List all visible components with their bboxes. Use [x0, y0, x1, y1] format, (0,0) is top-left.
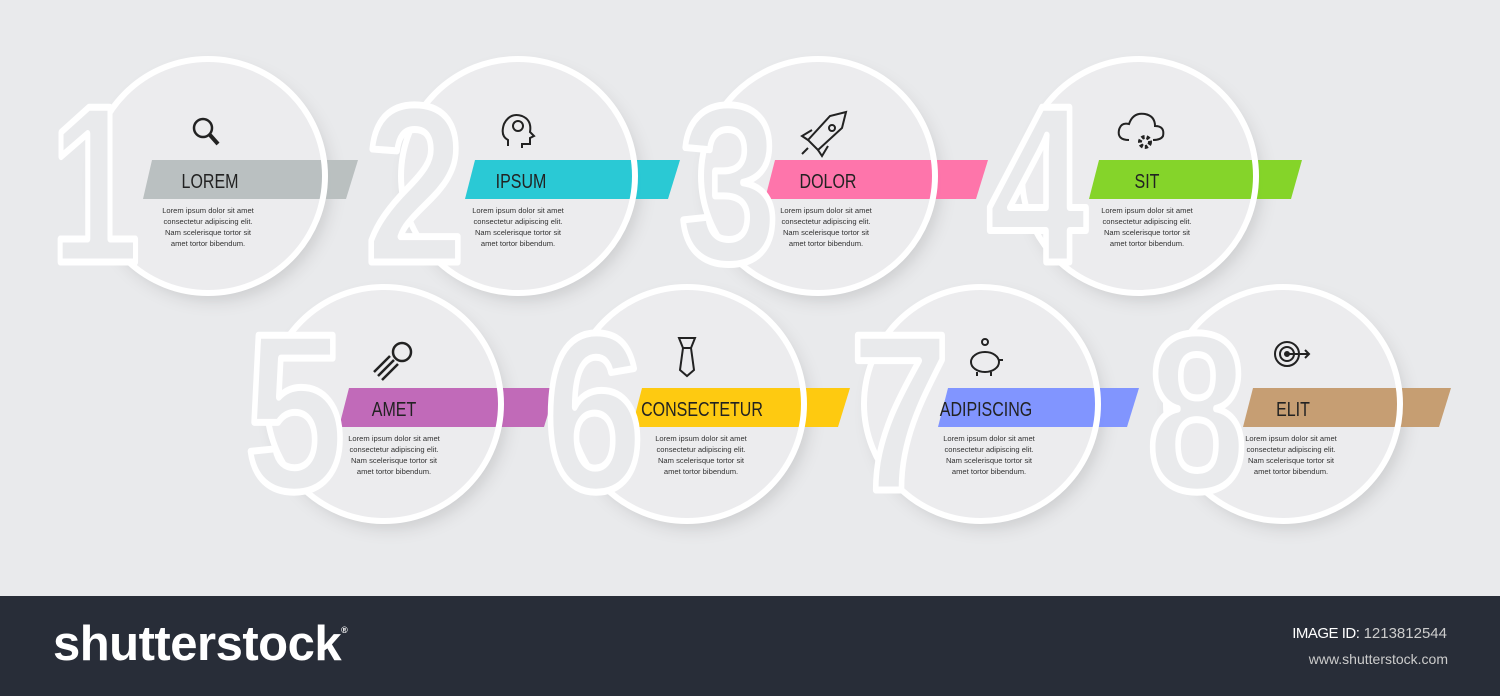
number 8: 8: [1147, 288, 1247, 539]
body text 2: Nam scelerisque tortor sit: [475, 228, 562, 237]
step 3: [679, 59, 988, 311]
body text 5: Lorem ipsum dolor sit amet: [348, 434, 441, 443]
banner 3: [765, 160, 988, 199]
icon: piggy bank: [971, 339, 1003, 376]
title 6: CONSECTETUR: [641, 398, 763, 420]
number 5: 5: [245, 288, 345, 539]
logo: shutterstock®: [53, 617, 347, 671]
body text 8: [1245, 434, 1338, 476]
icon: tie: [679, 338, 695, 376]
body text 1: [162, 206, 255, 248]
number 3: 3: [679, 60, 779, 311]
number 1: 1: [50, 59, 140, 310]
body text 2: [472, 206, 565, 248]
step 5: [245, 287, 556, 539]
number 6: 6: [544, 288, 644, 539]
body text 1: amet tortor bibendum.: [171, 239, 245, 248]
body text 6: consectetur adipiscing elit.: [656, 445, 746, 454]
footer bar: [0, 596, 1500, 696]
body text 5: consectetur adipiscing elit.: [349, 445, 439, 454]
body text 3: consectetur adipiscing elit.: [781, 217, 871, 226]
banner 6: [632, 388, 850, 427]
body text 3: Nam scelerisque tortor sit: [783, 228, 870, 237]
banner 8: [1243, 388, 1451, 427]
body text 4: consectetur adipiscing elit.: [1102, 217, 1192, 226]
body text 8: Lorem ipsum dolor sit amet: [1245, 434, 1338, 443]
number 2: 2: [365, 60, 465, 311]
body text 2: Lorem ipsum dolor sit amet: [472, 206, 565, 215]
body text 8: consectetur adipiscing elit.: [1246, 445, 1336, 454]
body text 3: amet tortor bibendum.: [789, 239, 863, 248]
banner 4: [1089, 160, 1302, 199]
step 2: [365, 59, 680, 311]
icon: rocket: [802, 112, 846, 156]
image id: IMAGE ID: 1213812544: [1292, 625, 1447, 642]
body text 8: Nam scelerisque tortor sit: [1248, 456, 1335, 465]
step 8: [1147, 287, 1451, 539]
step 4: [987, 59, 1302, 311]
body text 7: consectetur adipiscing elit.: [944, 445, 1034, 454]
body text 4: amet tortor bibendum.: [1110, 239, 1184, 248]
body text 6: amet tortor bibendum.: [664, 467, 738, 476]
body text 1: Lorem ipsum dolor sit amet: [162, 206, 255, 215]
body text 3: [780, 206, 873, 248]
body text 7: Lorem ipsum dolor sit amet: [943, 434, 1036, 443]
body text 1: Nam scelerisque tortor sit: [165, 228, 252, 237]
body text 4: [1101, 206, 1194, 248]
title 8: ELIT: [1276, 398, 1310, 420]
title 2: IPSUM: [496, 170, 546, 192]
body text 3: Lorem ipsum dolor sit amet: [780, 206, 873, 215]
icon: handshake: [374, 343, 411, 380]
icon: target: [1275, 342, 1309, 366]
icon: head: [503, 115, 534, 148]
body text 5: amet tortor bibendum.: [357, 467, 431, 476]
icon: cloud gear: [1119, 114, 1163, 147]
title 1: LOREM: [182, 170, 238, 192]
body text 7: [943, 434, 1036, 476]
body text 6: Lorem ipsum dolor sit amet: [655, 434, 748, 443]
banner 1: [143, 160, 358, 199]
banner 7: [938, 388, 1139, 427]
title 4: SIT: [1135, 170, 1159, 192]
title 3: DOLOR: [800, 170, 856, 192]
body text 4: Nam scelerisque tortor sit: [1104, 228, 1191, 237]
body text 7: Nam scelerisque tortor sit: [946, 456, 1033, 465]
title 7: ADIPISCING: [940, 398, 1032, 420]
body text 1: consectetur adipiscing elit.: [163, 217, 253, 226]
title 5: AMET: [372, 398, 416, 420]
icon: magnifier: [194, 119, 218, 144]
number 4: 4: [987, 60, 1087, 311]
body text 2: amet tortor bibendum.: [481, 239, 555, 248]
step 1: [50, 59, 358, 310]
banner 5: [339, 388, 556, 427]
number 7: 7: [850, 288, 950, 539]
body text 5: Nam scelerisque tortor sit: [351, 456, 438, 465]
body text 2: consectetur adipiscing elit.: [473, 217, 563, 226]
body text 6: Nam scelerisque tortor sit: [658, 456, 745, 465]
banner 2: [465, 160, 680, 199]
body text 4: Lorem ipsum dolor sit amet: [1101, 206, 1194, 215]
body text 5: [348, 434, 441, 476]
website: www.shutterstock.com: [1309, 651, 1448, 667]
step 7: [850, 287, 1139, 539]
body text 6: [655, 434, 748, 476]
step 6: [544, 287, 850, 539]
body text 8: amet tortor bibendum.: [1254, 467, 1328, 476]
body text 7: amet tortor bibendum.: [952, 467, 1026, 476]
